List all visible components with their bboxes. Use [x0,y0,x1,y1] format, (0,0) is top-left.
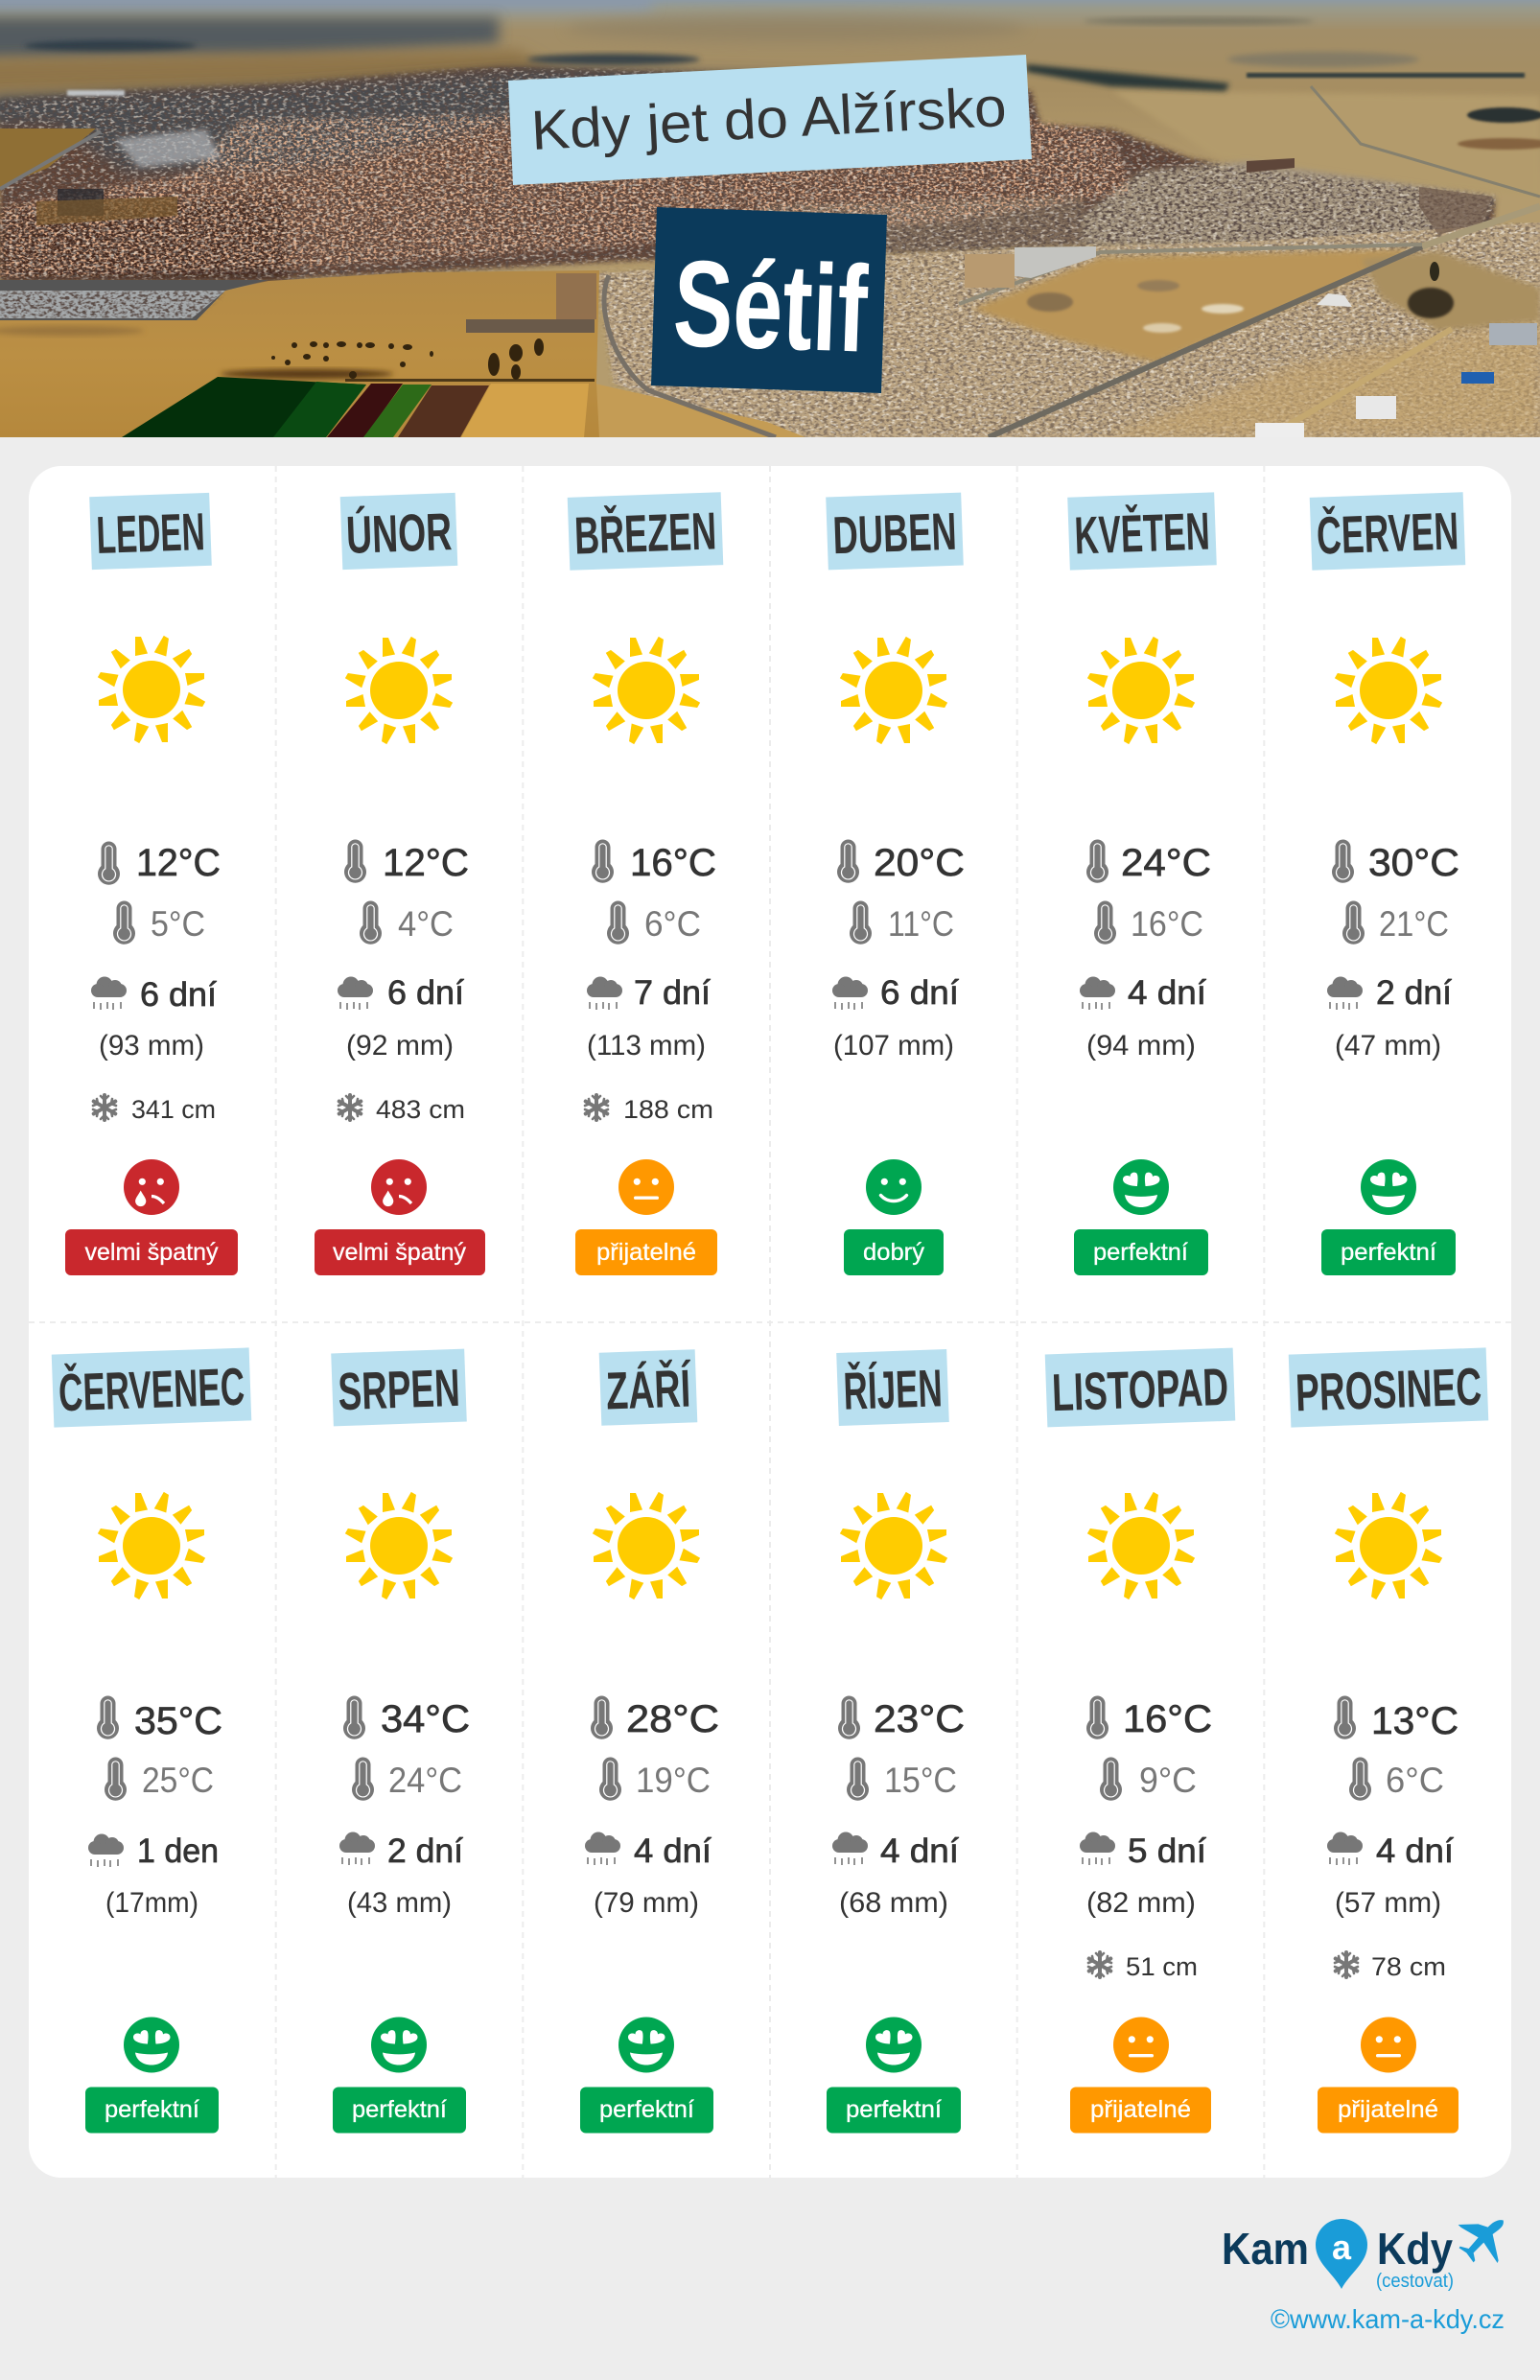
month heading: LISTOPAD [1051,1357,1229,1422]
low temperature: 9°C [1139,1761,1197,1800]
icon: thermometer low [1342,901,1365,945]
rating badge: přijatelné [596,1239,696,1266]
icon: sun [345,1492,453,1599]
icon: rain cloud [1327,976,1363,1010]
golden steppe [0,270,599,437]
panel: PROSINEC [1289,1347,1488,2133]
rain days: 7 dní [634,974,711,1012]
panel: LISTOPAD [1045,1348,1235,2133]
pale warehouses [0,280,268,320]
high temperature: 35°C [134,1700,222,1742]
high temperature: 16°C [1123,1698,1212,1740]
icon: thermometer low [850,901,872,945]
low temperature: 6°C [1386,1761,1444,1800]
snow: 341 cm [131,1095,216,1124]
icon: thermometer high [591,1695,613,1739]
month heading [568,492,723,571]
panel: BŘEZEN [568,492,723,1275]
rating badge: velmi špatný [84,1239,219,1266]
rating badge [65,1229,238,1275]
high temperature: 28°C [626,1698,719,1740]
website url: ©www.kam-a-kdy.cz [1271,2304,1505,2334]
month heading [1067,492,1217,571]
precipitation: (47 mm) [1335,1030,1441,1062]
icon: sun [1087,1492,1195,1599]
low temperature: 21°C [1379,904,1449,944]
icon: thermometer high [592,840,614,883]
rain days: 6 dní [387,974,464,1012]
rating badge: přijatelné [1338,2096,1438,2123]
snow: 483 cm [376,1095,465,1124]
icon: thermometer low [1094,901,1116,945]
icon: smiling face [866,1159,922,1215]
panel: ŘÍJEN [827,1349,965,2133]
panel: KVĚTEN [1067,492,1217,1275]
low temperature: 5°C [151,904,205,944]
panel: ČERVENEC [52,1347,251,2133]
icon: sun [593,1492,700,1599]
icon: thermometer high [838,1695,860,1739]
logo: Kam a Kdy: Kam [1222,2224,1309,2274]
precipitation: (17mm) [105,1887,198,1919]
icon: snowflake [585,1095,608,1120]
icon: airplane [1458,2220,1504,2263]
icon: crying face [124,1159,179,1215]
roads [989,246,1422,437]
month heading: LEDEN [96,502,206,565]
icon: heart-eyes face [1113,1159,1169,1215]
buildings and roofs [1015,246,1096,278]
rain days: 2 dní [1376,974,1452,1012]
high temperature: 12°C [136,842,221,884]
icon: rain cloud [1327,1832,1363,1865]
icon: sun [1087,637,1195,744]
high temperature: 23°C [874,1698,965,1740]
rain days: 6 dní [880,974,959,1012]
rating badge: perfektní [1093,1239,1188,1266]
icon: sun [840,1492,947,1599]
rating badge [1321,1229,1456,1275]
icon: thermometer low [360,901,382,945]
rating badge: perfektní [599,2096,694,2123]
icon: snowflake [93,1095,116,1120]
icon: rain cloud [338,976,373,1010]
icon: sun [98,636,205,743]
high temperature: 12°C [383,842,469,884]
icon: thermometer low [352,1757,374,1801]
icon: neutral face [618,1159,674,1215]
icon: heart-eyes face [1361,1159,1416,1215]
icon: neutral face [1113,2018,1169,2073]
month heading [1045,1348,1235,1427]
rating badge: dobrý [863,1239,925,1266]
rating badge [844,1229,944,1275]
icon: thermometer low [113,901,135,945]
left field and industrial roofs [0,128,96,187]
snow: 188 cm [623,1095,713,1124]
precipitation: (68 mm) [839,1887,948,1919]
icon: rain cloud [339,1832,375,1865]
month heading: BŘEZEN [573,501,717,566]
icon: neutral face [1361,2018,1416,2073]
rain days: 5 dní [1128,1832,1206,1870]
rating badge [85,2087,219,2133]
precipitation: (107 mm) [833,1030,954,1062]
high temperature: 13°C [1371,1700,1458,1742]
month heading: KVĚTEN [1074,502,1211,565]
icon: rain cloud [585,1832,620,1865]
panel: SRPEN [331,1349,470,2133]
icon: thermometer low [1100,1757,1122,1801]
precipitation: (43 mm) [347,1887,452,1919]
rating badge [315,1229,485,1275]
icon: rain cloud [1080,976,1115,1010]
rating badge: perfektní [846,2096,942,2123]
snow: 51 cm [1126,1952,1198,1981]
month heading: DUBEN [832,502,958,565]
icon: map pin: a [1332,2228,1352,2267]
high temperature: 16°C [630,842,716,884]
precipitation: (57 mm) [1335,1887,1441,1919]
rating badge: přijatelné [1090,2096,1191,2123]
icon: rain cloud [832,1832,868,1865]
icon: thermometer high [1086,1695,1108,1739]
empty central plot [972,249,1419,362]
icon: rain cloud [832,976,868,1010]
icon: heart-eyes face [124,2018,179,2073]
icon: thermometer high [344,840,366,883]
low temperature: 24°C [388,1761,462,1800]
rain days: 2 dní [387,1832,463,1870]
rating badge [575,1229,717,1275]
city [0,67,1496,280]
icon: thermometer low [1349,1757,1371,1801]
title banner [508,55,1032,185]
panel: ÚNOR [315,493,485,1275]
rating badge: velmi špatný [333,1239,466,1266]
icon: thermometer high [1086,840,1108,883]
month heading: ČERVENEC [58,1357,245,1422]
month heading: ČERVEN [1316,501,1459,566]
icon: thermometer high [343,1695,365,1739]
lower right districts [596,222,1540,437]
title text: Kdy jet do Alžírsko [529,76,1008,162]
icon: sun [98,1492,205,1599]
precipitation: (94 mm) [1086,1030,1196,1062]
low temperature: 19°C [636,1761,711,1800]
icon: heart-eyes face [371,2018,427,2073]
icon: rain cloud [587,976,622,1010]
panel: LEDEN [65,493,238,1275]
rating badge [580,2087,713,2133]
month heading [599,1349,697,1426]
high temperature: 30°C [1368,842,1459,884]
icon: sun [1335,1492,1442,1599]
icon: map pin [1316,2219,1367,2289]
precipitation: (79 mm) [594,1887,699,1919]
low temperature: 16°C [1131,904,1203,944]
hero photo: aerial view of Sétif [0,0,1540,438]
icon: heart-eyes face [866,2018,922,2073]
icon: rain cloud [91,976,127,1010]
icon: snowflake [338,1095,362,1120]
icon: crying face [371,1159,427,1215]
month heading [836,1349,949,1426]
icon: thermometer low [607,901,629,945]
panel: ČERVEN [1310,492,1465,1275]
snow: 78 cm [1371,1952,1446,1981]
rating badge [1074,1229,1208,1275]
rain days: 4 dní [1376,1832,1454,1870]
low temperature: 6°C [644,904,701,944]
icon: thermometer low [105,1757,127,1801]
month heading: ÚNOR [345,502,453,565]
month heading [89,493,212,570]
logo: Kam a Kdy: Kdy [1377,2224,1453,2274]
rain days: 1 den [137,1832,219,1870]
icon: snowflake [1088,1952,1111,1977]
icon: thermometer high [1334,1695,1356,1739]
month heading [826,493,964,570]
low temperature: 15°C [884,1761,957,1800]
rain days: 4 dní [634,1832,712,1870]
panel: DUBEN [826,493,965,1275]
rating badge [333,2087,466,2133]
right plain [1121,92,1538,132]
icon: sun [840,637,947,744]
rating badge: perfektní [1341,1239,1436,1266]
month heading: ZÁŘÍ [605,1358,692,1421]
icon: sun [593,637,700,744]
month heading: SRPEN [338,1358,461,1421]
icon: thermometer low [847,1757,869,1801]
icon: thermometer high [97,1695,119,1739]
icon: rain cloud [1080,1832,1115,1865]
month heading: ŘÍJEN [843,1358,944,1421]
icon: heart-eyes face [618,2018,674,2073]
icon: sun [345,637,453,744]
logo: Kam a Kdy [1222,2219,1504,2292]
low temperature: 4°C [398,904,454,944]
month heading [52,1347,251,1428]
tree belt [221,369,393,379]
icon: thermometer high [837,840,859,883]
rating badge: perfektní [105,2096,199,2123]
rain days: 4 dní [880,1832,959,1870]
high temperature: 20°C [874,842,965,884]
rain days: 4 dní [1128,974,1206,1012]
panel: months card [29,466,1511,2178]
icon: sun [1335,637,1442,744]
precipitation: (82 mm) [1086,1887,1196,1919]
low temperature: 25°C [142,1761,214,1800]
month heading [340,493,457,570]
panel: ZÁŘÍ [580,1349,719,2133]
rating badge [1318,2087,1458,2133]
icon: thermometer low [599,1757,621,1801]
icon: thermometer high [1332,840,1354,883]
precipitation: (113 mm) [587,1030,706,1062]
rain days: 6 dní [140,976,217,1014]
high temperature: 24°C [1121,842,1211,884]
rating badge: perfektní [352,2096,447,2123]
fields [122,377,366,437]
precipitation: (93 mm) [99,1030,204,1062]
city name: Sétif [671,235,870,379]
month heading [331,1349,467,1426]
precipitation: (92 mm) [346,1030,454,1062]
rating badge [827,2087,961,2133]
icon: snowflake [1335,1952,1358,1977]
icon: thermometer high [98,842,120,885]
logo: Kam a Kdy: (cestovat) [1376,2271,1454,2292]
low temperature: 11°C [888,904,954,944]
high temperature: 34°C [381,1698,470,1740]
icon: rain cloud [88,1833,124,1867]
month heading [1310,492,1465,571]
rating badge [1070,2087,1211,2133]
month heading [1289,1347,1488,1428]
city banner [651,207,887,393]
